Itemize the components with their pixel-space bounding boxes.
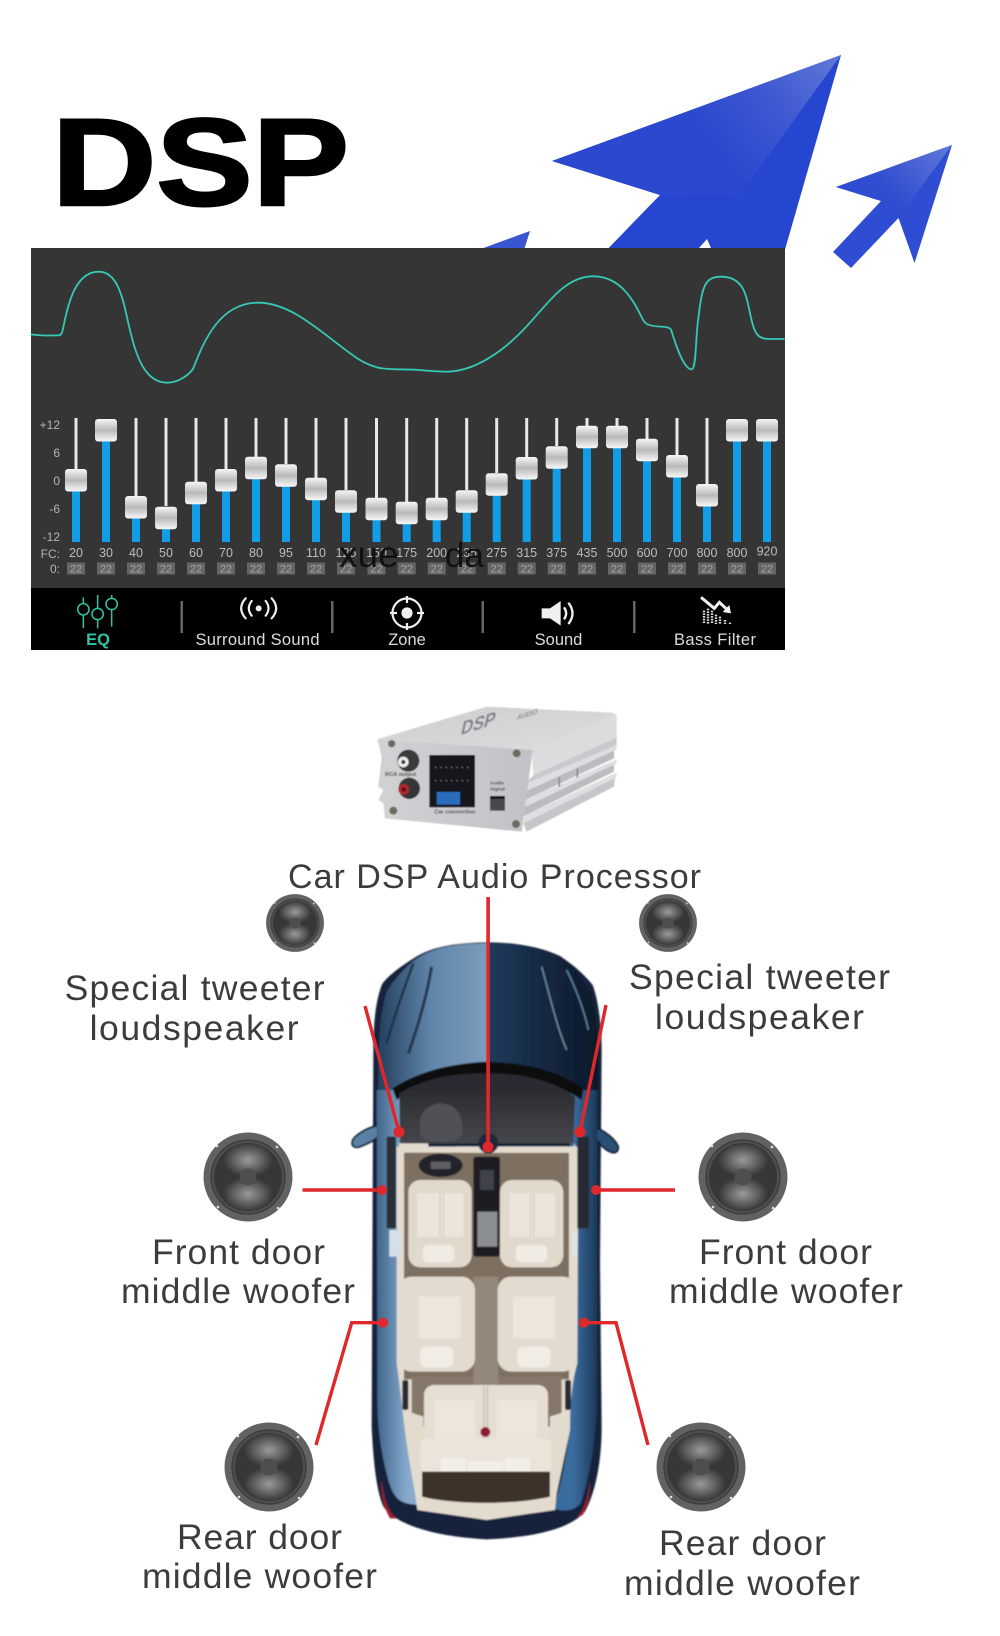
DSP processor device: Signal (490, 787, 506, 793)
sliders: 22 (551, 564, 563, 576)
connector: right tweeter (574, 1005, 606, 1138)
sliders: 315 (516, 546, 537, 560)
DSP processor device: Audio (490, 781, 504, 787)
DSP processor device: RCA output (385, 772, 416, 778)
icon: left front woofer (204, 1132, 292, 1222)
sliders: 22 (220, 564, 232, 576)
label: left front door (121, 1232, 355, 1311)
label: right rear door: middle woofer (624, 1563, 860, 1603)
label: left rear door: Rear door (177, 1517, 342, 1557)
panel: EQ screen (31, 248, 785, 650)
sliders: 22 (310, 564, 322, 576)
sliders (65, 418, 778, 576)
toolbar (31, 588, 785, 650)
icon: zone (390, 596, 424, 630)
sliders: 435 (577, 546, 597, 560)
icon: right rear woofer (656, 1422, 746, 1512)
sliders: 22 (130, 564, 142, 576)
rear lights (381, 1480, 590, 1518)
sliders: 235 (456, 546, 477, 560)
third row seat (421, 1385, 551, 1473)
label: right rear door (624, 1523, 860, 1603)
sliders: 500 (607, 546, 627, 560)
hood (378, 943, 488, 1090)
icon: left tweeter speaker (266, 894, 324, 952)
sliders: 22 (160, 564, 172, 576)
label: right front door: Front door (699, 1232, 872, 1272)
label: Zone: Zone (388, 631, 426, 649)
label: Surround Sound: Surround Sound (196, 631, 320, 649)
sliders: 275 (486, 546, 507, 560)
icon: left rear woofer (224, 1422, 314, 1512)
sliders: 50 (159, 546, 173, 560)
icon: surround sound (241, 598, 276, 618)
interior (397, 1147, 578, 1520)
second row seats (398, 1277, 576, 1372)
sliders: 40 (129, 546, 143, 560)
car mirrors (352, 1125, 380, 1147)
icon: EQ sliders (78, 595, 117, 628)
label: right front door (669, 1232, 903, 1311)
label: left tweeter: loudspeaker (90, 1008, 299, 1048)
sliders: 70 (219, 546, 233, 560)
connector: processor to car centre (482, 897, 494, 1152)
sliders: 600 (637, 546, 657, 560)
label: right tweeter: loudspeaker (655, 997, 864, 1037)
cargo floor (422, 1472, 550, 1503)
sliders: 22 (100, 564, 112, 576)
label: left tweeter: Special tweeter (65, 968, 325, 1008)
label: right front door: middle woofer (669, 1271, 903, 1311)
door panels (387, 1137, 396, 1228)
center console (473, 1157, 500, 1257)
sliders: 125 (336, 546, 356, 560)
sliders: 22 (701, 564, 713, 576)
sliders: 800 (727, 546, 747, 560)
sliders: 20 (69, 546, 83, 560)
icon: right front woofer (698, 1132, 788, 1222)
sliders: 22 (431, 564, 443, 576)
sliders: 22 (370, 564, 383, 576)
EQ scale labels: 0: (50, 562, 60, 576)
sliders: 920 (757, 544, 777, 558)
DSP processor device: Car connection (434, 809, 476, 815)
dashboard (399, 1073, 575, 1143)
EQ scale labels: +12 (40, 418, 60, 432)
sliders: 175 (396, 546, 417, 560)
sliders: 22 (581, 564, 593, 576)
steering wheel (419, 1154, 463, 1177)
sliders: 200 (426, 546, 447, 560)
sliders: 22 (611, 564, 623, 576)
sliders: 22 (521, 564, 533, 576)
sliders: 22 (731, 564, 743, 576)
sliders: 110 (306, 546, 326, 560)
icon: large blue arrow (552, 55, 841, 260)
DSP processor device: AUDIO (516, 706, 539, 722)
sliders: 80 (249, 546, 263, 560)
label: left rear door: middle woofer (142, 1556, 377, 1596)
connector: left front door (302, 1185, 387, 1195)
EQ scale labels: FC: (41, 547, 60, 561)
sliders: 22 (401, 564, 413, 576)
label: right tweeter (629, 957, 890, 1037)
connector: right front door (591, 1185, 675, 1195)
icon: bass filter (701, 597, 731, 624)
title: DSP: DSP (52, 94, 349, 232)
watermark: xue: xue (339, 534, 399, 575)
connector: left rear door (316, 1318, 388, 1445)
icon: right tweeter speaker (639, 894, 697, 952)
connector: left tweeter (365, 1006, 404, 1138)
side panels (377, 1090, 418, 1505)
sliders: 22 (641, 564, 653, 576)
label: EQ: EQ (86, 631, 110, 649)
EQ scale labels: 0 (53, 474, 60, 488)
label: left front door: Front door (152, 1232, 325, 1272)
sliders: 22 (340, 564, 352, 576)
sliders: 60 (189, 546, 203, 560)
EQ scale labels (40, 418, 60, 576)
EQ scale labels: -6 (49, 502, 60, 516)
label: left tweeter (65, 968, 325, 1048)
label: Sound: Sound (535, 631, 582, 649)
icon: arrow tip behind panel (478, 231, 530, 250)
sliders: 30 (99, 546, 113, 560)
sliders: 375 (546, 546, 567, 560)
sliders: 22 (761, 564, 773, 576)
sliders: 800 (697, 546, 717, 560)
windshield band (393, 1062, 583, 1100)
sliders: 22 (671, 564, 683, 576)
car body (372, 942, 602, 1539)
sliders: 22 (70, 564, 82, 576)
icon: sound (542, 601, 572, 626)
connector: right rear door (579, 1318, 648, 1445)
sliders: 150 (366, 546, 387, 560)
sliders: 22 (491, 564, 503, 576)
sliders: 95 (279, 546, 293, 560)
label: right tweeter: Special tweeter (629, 957, 890, 997)
EQ scale labels: -12 (43, 530, 60, 544)
EQ scale labels: 6 (53, 446, 60, 460)
sliders: 700 (667, 546, 687, 560)
label: right rear door: Rear door (659, 1523, 826, 1563)
label: left rear door (142, 1517, 377, 1596)
sliders: 22 (280, 564, 292, 576)
front seats (408, 1180, 563, 1267)
sliders: 22 (250, 564, 262, 576)
DSP processor device (377, 706, 617, 832)
icon: small blue arrow (833, 145, 952, 268)
DSP processor device: DSP (459, 707, 498, 739)
label: Bass Filter: Bass Filter (674, 631, 756, 649)
watermark: da: da (445, 536, 484, 575)
third row side trim (402, 1380, 571, 1467)
EQ response curve (31, 272, 785, 383)
label: Car DSP Audio Processor: Car DSP Audio Processor (288, 858, 701, 896)
car top view (352, 942, 618, 1539)
sliders: 22 (461, 564, 473, 576)
label: left front door: middle woofer (121, 1271, 355, 1311)
sliders: 22 (190, 564, 202, 576)
